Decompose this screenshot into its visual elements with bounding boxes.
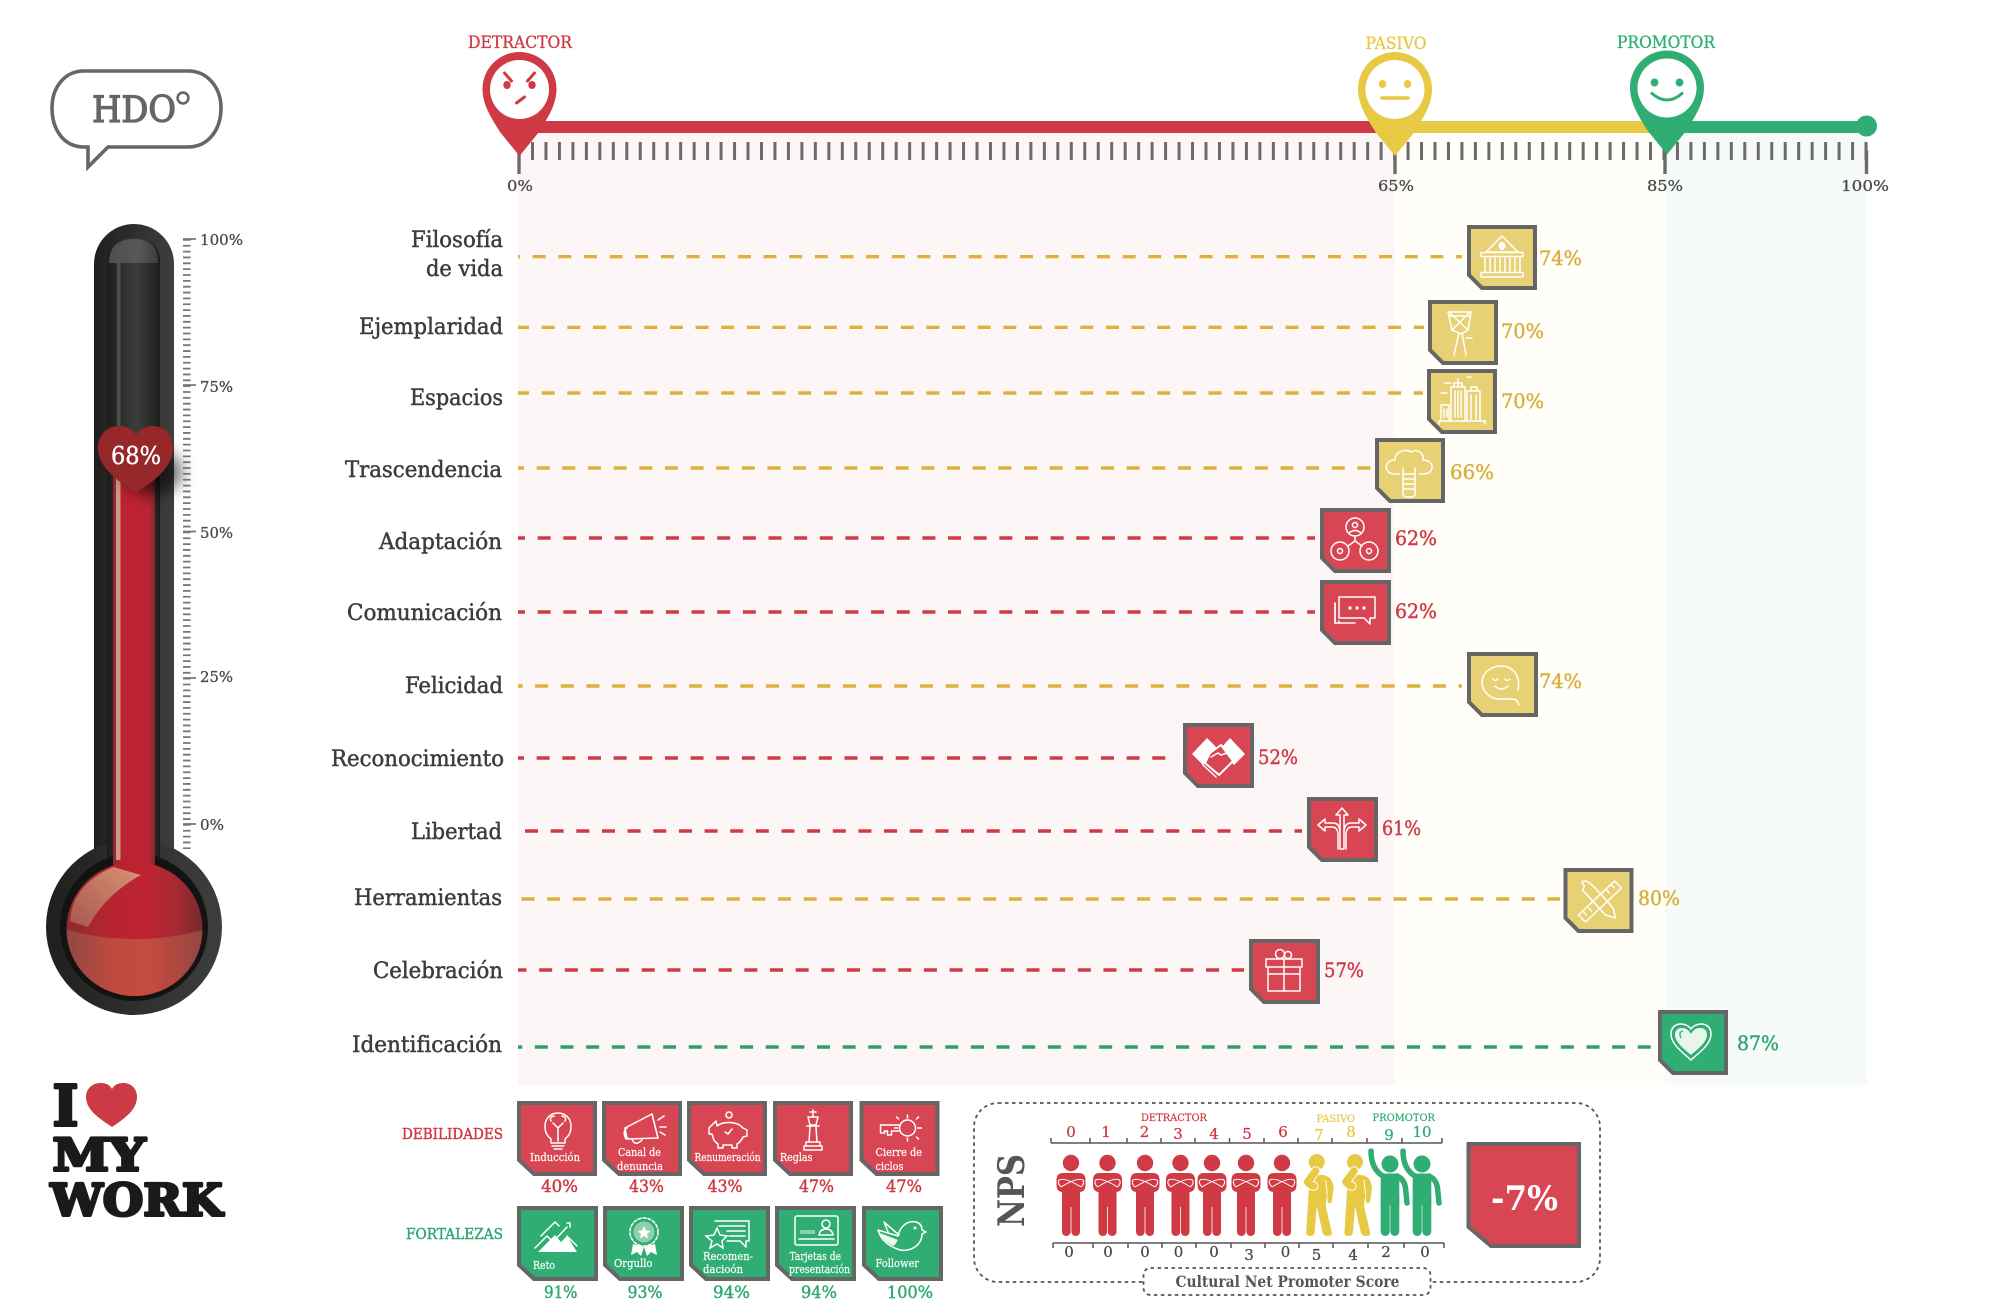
row: Filosofía de vida: de vida <box>426 257 503 282</box>
logo: I love my work: I <box>52 1074 78 1140</box>
thermometer inner tube <box>107 238 160 865</box>
thermometer bulb glass <box>66 864 202 996</box>
card: Canal de denuncia: denuncia <box>617 1160 663 1173</box>
axis end dot <box>1856 116 1877 136</box>
card: Tarjetas de presentación <box>777 1208 854 1303</box>
thermometer scale labels: 25% <box>200 668 233 686</box>
row: Identificación: Identificación <box>352 1033 502 1058</box>
card: Canal de denuncia: Canal de <box>618 1146 661 1159</box>
caption: Cultural Net Promoter Score: Cultural Net Promoter Score <box>1176 1272 1400 1291</box>
card: Canal de denuncia: 43% <box>629 1177 664 1197</box>
top scale numbers: 8 <box>1346 1123 1356 1141</box>
top scale numbers: 10 <box>1412 1123 1432 1141</box>
row: Ejemplaridad <box>359 302 1544 363</box>
band: promoter zone <box>1665 132 1867 1085</box>
row: Identificación <box>352 1012 1779 1073</box>
row: Filosofía de vida: 74% <box>1539 246 1582 270</box>
top scale line <box>1051 1138 1442 1143</box>
top scale numbers: 1 <box>1101 1123 1111 1141</box>
heart marker 68% <box>98 426 173 492</box>
row: Espacios: Espacios <box>410 386 503 411</box>
group captions <box>1141 1112 1436 1125</box>
row: Filosofía de vida <box>411 227 1582 288</box>
card: Canal de denuncia <box>604 1103 680 1197</box>
row: Filosofía de vida: Filosofía <box>411 228 503 253</box>
axis labels: 100% <box>1841 177 1889 195</box>
red liquid column <box>113 470 155 870</box>
speech bubble logo: HDO <box>52 71 221 167</box>
score box -7%: -7% <box>1491 1179 1558 1219</box>
row: Trascendencia <box>345 440 1494 501</box>
pin: passive neutral face <box>1358 52 1432 156</box>
axis tick marks <box>519 150 1868 174</box>
thermometer scale labels: 50% <box>200 524 233 542</box>
row: Felicidad <box>405 654 1582 715</box>
caption: Cultural Net Promoter Score <box>1144 1268 1430 1295</box>
row: Reconocimiento: Reconocimiento <box>331 747 504 772</box>
card: Reglas: 47% <box>799 1177 834 1197</box>
thermometer scale labels: 100% <box>200 231 243 249</box>
label: pasivo: PASIVO <box>1366 34 1426 53</box>
detractor people <box>1056 1155 1296 1236</box>
row: Herramientas: Herramientas <box>354 886 502 911</box>
panel dashed frame <box>974 1103 1600 1282</box>
card: Reto: Reto <box>533 1259 555 1272</box>
bottom scale numbers: 0 <box>1140 1243 1150 1261</box>
score box -7% <box>1468 1144 1579 1246</box>
card: Recomendación: 94% <box>713 1283 750 1303</box>
panel: NPS <box>974 1103 1600 1295</box>
top scale numbers: 2 <box>1140 1123 1149 1141</box>
bottom scale numbers: 0 <box>1103 1243 1113 1261</box>
promoter bar segment <box>1666 121 1861 133</box>
bottom scale numbers: 2 <box>1381 1243 1391 1261</box>
bottom scale numbers: 0 <box>1209 1243 1219 1261</box>
card: Orgullo: Orgullo <box>614 1257 653 1270</box>
bottom scale numbers: 0 <box>1420 1243 1430 1261</box>
label: detractor: DETRACTOR <box>468 33 573 52</box>
thermometer casing <box>46 224 222 1015</box>
row: Trascendencia: 66% <box>1450 460 1494 484</box>
band: detractor zone <box>518 132 1395 1085</box>
row: Espacios: 70% <box>1501 389 1544 413</box>
speech bubble logo: HDO: HDO <box>92 90 176 131</box>
axis labels: 85% <box>1647 177 1683 195</box>
card: Reglas <box>775 1103 851 1197</box>
row: Comunicación: Comunicación <box>347 601 502 626</box>
group captions: PASIVO <box>1316 1113 1355 1125</box>
row: Libertad: Libertad <box>411 820 502 845</box>
card: Reto: 91% <box>544 1283 578 1303</box>
row: Identificación: 87% <box>1737 1031 1779 1055</box>
heading: debilidades: DEBILIDADES <box>402 1125 503 1143</box>
row: Celebración: 57% <box>1324 958 1364 982</box>
card: Reto <box>519 1208 596 1303</box>
card: Follower: Follower <box>876 1257 920 1270</box>
card: Cierre de ciclos <box>862 1103 938 1197</box>
row: Trascendencia: Trascendencia <box>345 458 502 483</box>
card: Tarjetas de presentación: Tarjetas de <box>790 1250 841 1263</box>
heading: fortalezas: FORTALEZAS <box>406 1225 503 1243</box>
detractor bar segment <box>519 121 1395 133</box>
top scale numbers: 0 <box>1066 1123 1076 1141</box>
axis labels: 65% <box>1378 177 1414 195</box>
bottom scale line <box>1053 1243 1444 1248</box>
card: Orgullo: 93% <box>628 1283 662 1303</box>
top scale numbers: 3 <box>1173 1125 1183 1143</box>
thermometer scale labels: 0% <box>200 816 224 834</box>
row: Libertad <box>411 799 1421 860</box>
card: Tarjetas de presentación: presentación <box>789 1263 850 1276</box>
row: Felicidad: Felicidad <box>405 674 503 699</box>
logo: I love my work: MY <box>52 1128 146 1182</box>
card: Recomendación: dacioón <box>703 1263 743 1276</box>
pin: promoter happy face <box>1630 50 1704 154</box>
group captions: DETRACTOR <box>1141 1112 1208 1124</box>
row: Espacios <box>410 371 1544 432</box>
top axis <box>468 33 1889 195</box>
row: Comunicación: 62% <box>1395 599 1437 623</box>
thermometer scale labels <box>200 231 243 834</box>
top scale numbers: 7 <box>1314 1126 1324 1144</box>
passive people <box>1306 1154 1372 1236</box>
promoter people <box>1371 1151 1439 1236</box>
row: Celebración <box>373 941 1364 1002</box>
row: Reconocimiento: 52% <box>1258 745 1298 769</box>
row: Comunicación <box>347 582 1437 643</box>
heart marker 68%: 68% <box>111 442 161 470</box>
logo: I love my work: WORK <box>49 1176 224 1226</box>
row: Adaptación <box>378 510 1437 571</box>
thermometer bulb ring <box>60 853 208 1001</box>
group captions: PROMOTOR <box>1372 1112 1436 1124</box>
bottom scale numbers: 0 <box>1174 1243 1183 1261</box>
NPS vertical title: NPS <box>991 1154 1033 1227</box>
top scale numbers: 9 <box>1384 1126 1394 1144</box>
thermometer scale ticks <box>183 239 196 849</box>
card: Inducción: Inducción <box>530 1151 580 1164</box>
card: Renumeración <box>689 1103 765 1197</box>
card: Recomendación <box>691 1208 768 1303</box>
row: Celebración: Celebración <box>373 959 503 984</box>
bottom scale numbers: 0 <box>1064 1243 1074 1261</box>
axis labels <box>507 177 1889 195</box>
label: promotor: PROMOTOR <box>1617 33 1716 52</box>
top scale numbers: 5 <box>1242 1125 1252 1143</box>
card: Cierre de ciclos: ciclos <box>876 1160 904 1173</box>
card: Follower: 100% <box>887 1283 933 1303</box>
axis labels: 0% <box>507 177 533 195</box>
card: Recomendación: Recomen- <box>703 1250 753 1263</box>
bottom scale numbers: 5 <box>1312 1246 1321 1264</box>
heart shadow <box>122 450 182 494</box>
row: Ejemplaridad: Ejemplaridad <box>359 315 503 340</box>
row: Adaptación: Adaptación <box>378 530 502 555</box>
band: passive zone <box>1395 132 1665 1085</box>
row: Felicidad: 74% <box>1539 669 1582 693</box>
top scale numbers: 6 <box>1278 1123 1288 1141</box>
card: Renumeración: Renumeración <box>694 1151 760 1164</box>
top scale numbers: 4 <box>1209 1125 1219 1143</box>
row: Ejemplaridad: 70% <box>1501 319 1544 343</box>
row: Reconocimiento <box>331 725 1298 786</box>
row: Herramientas: 80% <box>1638 886 1680 910</box>
card: Inducción: 40% <box>541 1177 578 1197</box>
bottom scale numbers <box>1064 1243 1430 1264</box>
card: Follower <box>864 1208 941 1303</box>
card: Reglas: Reglas <box>780 1151 813 1164</box>
top scale numbers <box>1066 1123 1432 1144</box>
bottom scale numbers: 3 <box>1244 1246 1254 1264</box>
bottom scale numbers: 0 <box>1281 1243 1290 1261</box>
card: Tarjetas de presentación: 94% <box>801 1283 837 1303</box>
logo: I love my work <box>49 1074 224 1226</box>
passive bar segment <box>1395 121 1666 133</box>
pin: detractor angry face <box>482 52 556 156</box>
card: Cierre de ciclos: 47% <box>886 1177 922 1197</box>
row: Herramientas <box>354 870 1680 931</box>
bottom scale numbers: 4 <box>1348 1246 1358 1264</box>
card: Renumeración: 43% <box>708 1177 742 1197</box>
card: Cierre de ciclos: Cierre de <box>876 1146 922 1159</box>
card: Inducción <box>519 1103 595 1197</box>
card: Orgullo <box>605 1208 682 1303</box>
row: Libertad: 61% <box>1382 816 1421 840</box>
row: Adaptación: 62% <box>1395 526 1437 550</box>
thermometer scale labels: 75% <box>200 378 233 396</box>
thermometer <box>46 224 243 1015</box>
